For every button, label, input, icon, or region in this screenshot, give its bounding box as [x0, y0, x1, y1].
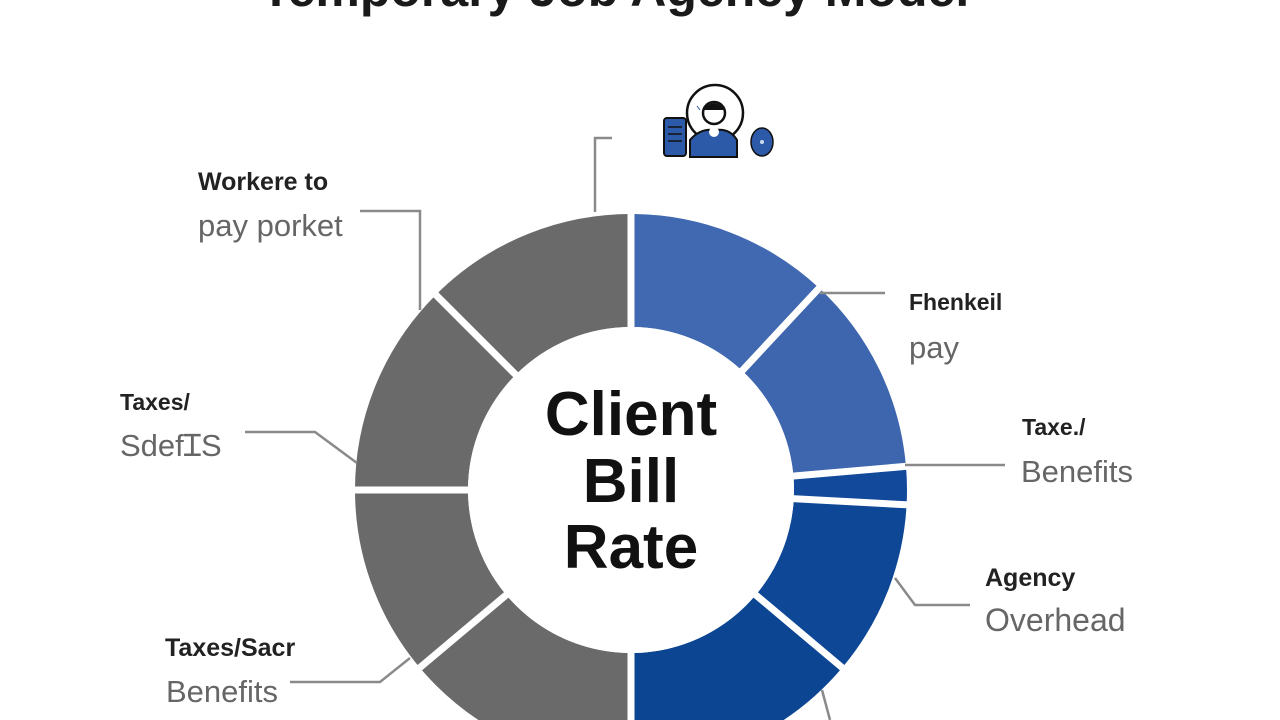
- center label: Rate: [564, 513, 698, 582]
- label: taxes right: Taxe./: [1022, 414, 1086, 440]
- label: fhenkeil pay: pay: [909, 330, 959, 365]
- label: agency overhead: [985, 564, 1126, 638]
- label: workers pay: pay porket: [198, 208, 343, 243]
- label: taxes left: Taxes/: [120, 389, 191, 415]
- label: taxes bottom left: Benefits: [166, 674, 278, 709]
- label: taxes right: Benefits: [1021, 454, 1133, 489]
- label: taxes left: SdefꞮS: [120, 428, 222, 463]
- label: taxes left: [120, 389, 222, 463]
- label: taxes right: [1021, 414, 1133, 489]
- label: fhenkeil pay: Fhenkeil: [909, 289, 1002, 315]
- connector lines: [245, 138, 1005, 720]
- label: agency overhead: Agency: [985, 564, 1075, 592]
- center label: Client: [545, 380, 717, 449]
- label: workers pay: Workere to: [198, 168, 328, 196]
- donut chart: [351, 205, 911, 720]
- label: fhenkeil pay: [909, 289, 1002, 365]
- label: agency overhead: Overhead: [985, 602, 1126, 638]
- label: taxes bottom left: [165, 634, 295, 709]
- label: workers pay: [198, 168, 343, 243]
- center label: Bill: [583, 447, 679, 516]
- icon: worker: [664, 85, 773, 157]
- center label: [545, 380, 717, 582]
- label: taxes bottom left: Taxes/Sacr: [165, 634, 295, 662]
